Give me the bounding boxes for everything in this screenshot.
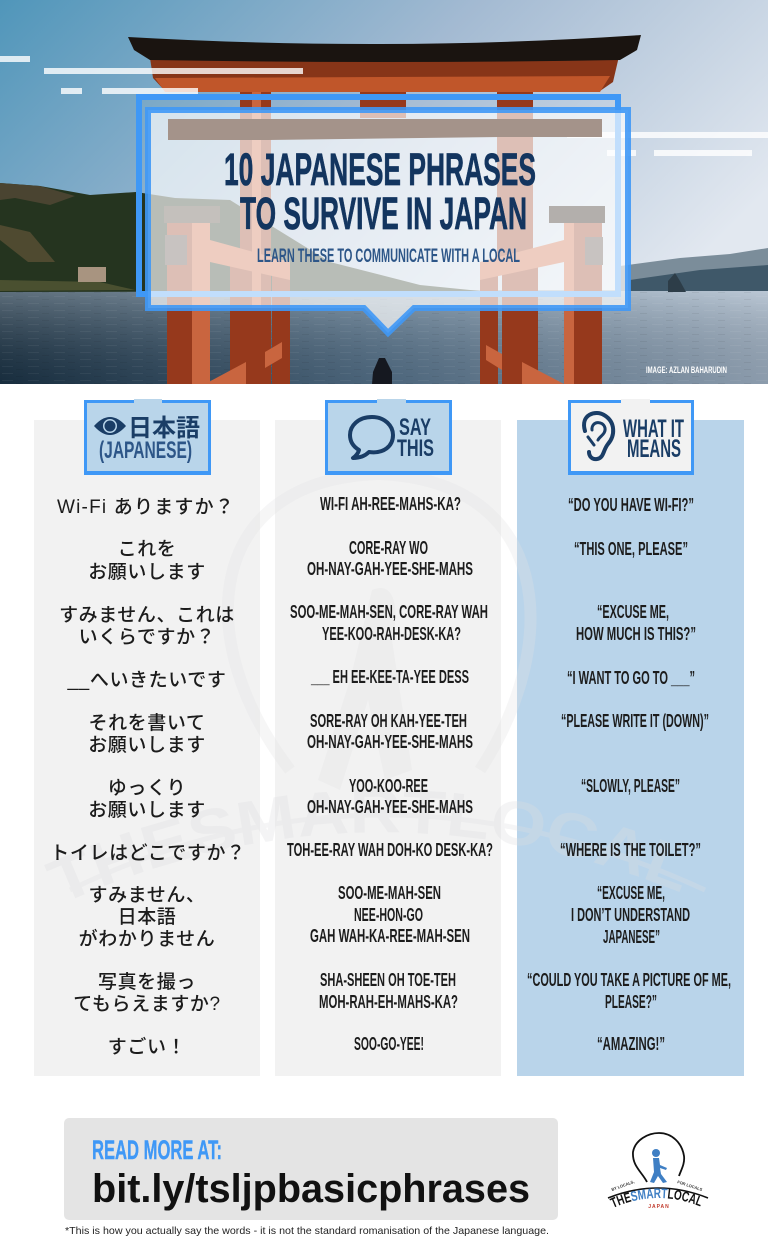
arc line [608, 1188, 708, 1198]
inner speech frame [148, 110, 628, 333]
read more panel [64, 1118, 558, 1220]
pronunciation column: OH-NAY-GAH-YEE-SHE-MAHS [307, 731, 473, 752]
read more label: READ MORE AT: [92, 1135, 222, 1165]
Japanese phrases column: お願いします [88, 735, 206, 756]
subtitle: LEARN THESE TO COMMUNICATE WITH A LOCAL [257, 246, 520, 267]
post caps [164, 206, 220, 223]
meaning column: “AMAZING!” [597, 1033, 665, 1054]
pronunciation column: OH-NAY-GAH-YEE-SHE-MAHS [307, 796, 473, 817]
Japanese phrases column: お願いします [88, 800, 206, 821]
icon: ear [584, 413, 613, 459]
Japanese phrases column: それを書いて [88, 712, 206, 734]
Japanese phrases column: __へいきたいです [67, 669, 226, 691]
watermark logo: THESMARTLOCAL [260, 798, 682, 892]
Japanese phrases column: Wi-Fi ありますか？ [57, 497, 235, 518]
pronunciation column: OH-NAY-GAH-YEE-SHE-MAHS [307, 558, 473, 579]
meaning column: “EXCUSE ME, [597, 601, 669, 622]
heading what it: WHAT IT [623, 415, 684, 443]
icon: speech bubble [350, 417, 393, 458]
Japanese phrases column: トイレはどこですか？ [50, 842, 246, 864]
pronunciation column: TOH-EE-RAY WAH DOH-KO DESK-KA? [287, 839, 493, 860]
meaning column [527, 494, 731, 1054]
meaning column: HOW MUCH IS THIS?” [576, 623, 696, 644]
pronunciation column: CORE-RAY WO [349, 537, 428, 558]
Japanese phrases column: これを [118, 539, 176, 560]
japan tag: JAPAN [648, 1204, 670, 1210]
Japanese phrases column: すごい！ [108, 1036, 186, 1058]
watermark logo [260, 499, 706, 892]
pronunciation column: MOH-RAH-EH-MAHS-KA? [319, 991, 458, 1012]
pronunciation column [287, 493, 493, 1054]
header: Japanese [84, 399, 211, 475]
bulb outline [633, 1133, 684, 1182]
gate posts [167, 90, 602, 384]
Japanese phrases column: いくらですか？ [79, 627, 215, 648]
tagline right: FOR LOCALS [677, 1179, 703, 1192]
title line two: TO SURVIVE IN JAPAN [240, 188, 527, 239]
walking figure [650, 1149, 667, 1183]
meaning column: JAPANESE” [603, 926, 660, 947]
Japanese phrases column: 写真を撮っ [98, 971, 196, 993]
pronunciation column: NEE-HON-GO [354, 904, 423, 925]
upper beam seen through panel [168, 119, 602, 140]
wordmark: THESMARTLOCAL [609, 1188, 701, 1208]
Japanese phrases column: すみません、 [88, 885, 206, 906]
pronunciation column: GAH WAH-KA-REE-MAH-SEN [310, 925, 470, 946]
pronunciation column: SORE-RAY OH KAH-YEE-TEH [310, 710, 467, 731]
meaning column: PLEASE?” [605, 991, 657, 1012]
pronunciation column: SOO-ME-MAH-SEN, CORE-RAY WAH [290, 601, 488, 622]
pronunciation column: ___ EH EE-KEE-TA-YEE DESS [310, 666, 469, 687]
pronunciation column: YOO-KOO-REE [349, 775, 428, 796]
title panel [139, 97, 628, 333]
footnote: *This is how you actually say the words - it is not the standard romanisation of the Japanese language. [65, 1225, 549, 1237]
tagline left: BY LOCALS, [611, 1179, 635, 1192]
logo: The Smart Local Japan [608, 1132, 708, 1210]
heading romaji: (JAPANESE) [99, 437, 192, 464]
right post cap [549, 206, 605, 223]
translucent panel fill [148, 110, 628, 333]
Japanese phrases column: ゆっくり [108, 777, 186, 799]
heading means: MEANS [627, 435, 681, 463]
header: say this [325, 399, 452, 475]
meaning column: I DON’T UNDERSTAND [571, 904, 690, 925]
Japanese phrases column: お願いします [88, 562, 206, 583]
short link: bit.ly/tsljpbasicphrases [92, 1167, 530, 1211]
Japanese phrases column: すみません、これは [59, 605, 235, 626]
icon: eye [94, 417, 126, 435]
pronunciation column: YEE-KOO-RAH-DESK-KA? [322, 623, 461, 644]
meaning column: “THIS ONE, PLEASE” [574, 538, 688, 559]
pronunciation column: WI-FI AH-REE-MAHS-KA? [320, 493, 461, 514]
header: what it means [568, 399, 694, 475]
pronunciation column: SHA-SHEEN OH TOE-TEH [320, 969, 456, 990]
Japanese phrases column: てもらえますか? [73, 994, 221, 1015]
pronunciation column: SOO-ME-MAH-SEN [338, 882, 441, 903]
meaning column: “EXCUSE ME, [597, 882, 665, 903]
meaning column: “SLOWLY, PLEASE” [581, 775, 680, 796]
Japanese phrases column [50, 497, 246, 1058]
hero photo: torii gate on a lake [0, 0, 768, 384]
Japanese phrases column: がわかりません [79, 928, 215, 950]
heading kanji: 日本語 [128, 415, 200, 442]
Japanese phrases column: 日本語 [118, 906, 176, 928]
title text: 10 JAPANESE PHRASES [224, 144, 536, 195]
heading say: SAY [399, 414, 431, 441]
white speed streaks [0, 56, 768, 156]
pronunciation column: SOO-GO-YEE! [354, 1033, 424, 1054]
outer frame [139, 97, 618, 294]
column backgrounds [34, 420, 744, 1076]
heading this: THIS [397, 435, 434, 462]
